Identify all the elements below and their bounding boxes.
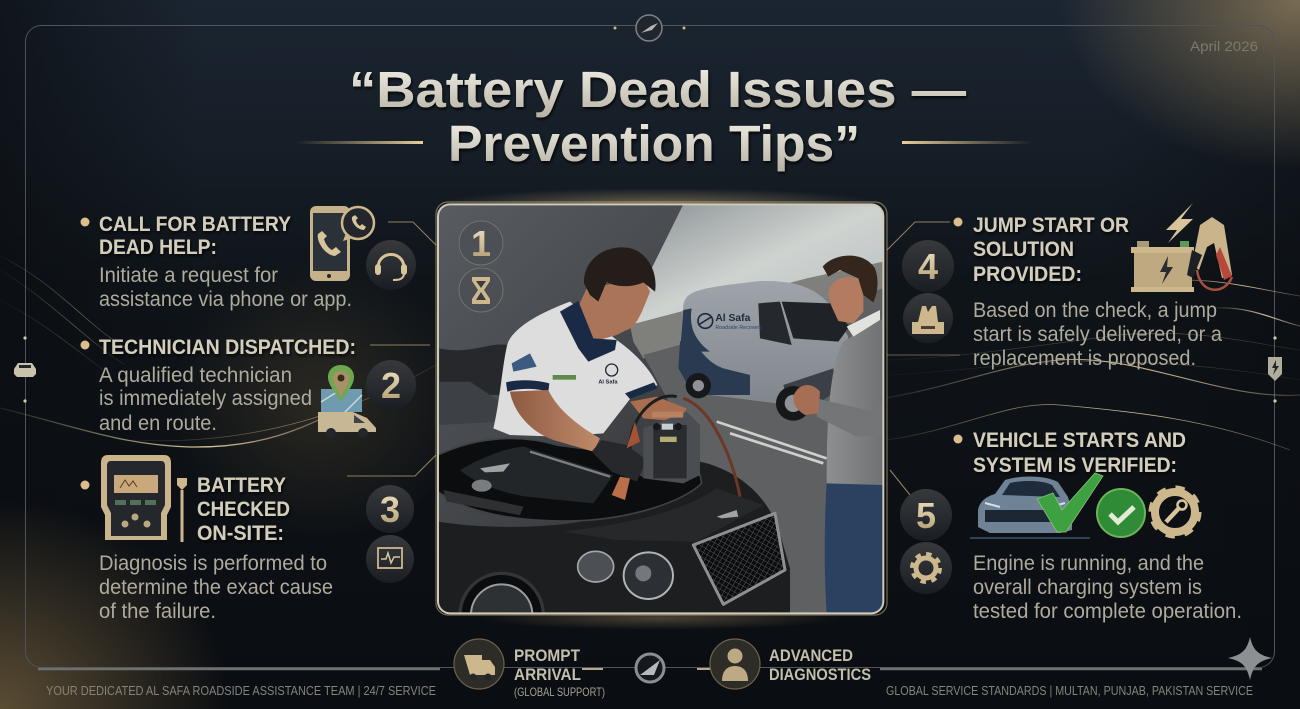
- step 3 heading: [197, 473, 290, 545]
- step 3 heading: BATTERY: [197, 473, 286, 497]
- footer: prompt arrival: [454, 639, 605, 699]
- step 4 heading: SOLUTION: [973, 237, 1074, 261]
- title accent lines: [295, 141, 1032, 144]
- step 4 description: Based on the check, a jump: [973, 299, 1217, 322]
- step 2 heading: TECHNICIAN DISPATCHED:: [99, 335, 356, 359]
- step 3 heading: CHECKED: [197, 497, 290, 521]
- icon: battery pulse badge: [366, 535, 414, 583]
- title: [349, 61, 966, 172]
- badge: step 2: [366, 360, 416, 410]
- step 4: jump start: [954, 213, 1222, 370]
- icon: worker badge: [710, 639, 760, 689]
- advanced diagnostics text: DIAGNOSTICS: [769, 665, 871, 684]
- icon: delivery truck badge: [454, 639, 504, 689]
- top logo emblem: [614, 15, 686, 41]
- step 4 description: [973, 299, 1222, 370]
- icon: gear with wrench: [1152, 488, 1198, 536]
- prompt arrival text: PROMPT: [514, 646, 581, 665]
- badge: step 1: 1: [471, 223, 491, 264]
- step 1: call for help: [80, 212, 352, 311]
- scene background: [438, 204, 883, 613]
- step 1 description: assistance via phone or app.: [99, 288, 352, 311]
- title: “Battery Dead Issues —: [349, 61, 966, 118]
- step 4 description: start is safely delivered, or a: [973, 323, 1222, 346]
- badge: step 5: [900, 489, 952, 541]
- step 5 heading: SYSTEM IS VERIFIED:: [973, 453, 1177, 477]
- icon: battery diagnostic tool: [101, 455, 187, 542]
- step 5 description: tested for complete operation.: [973, 600, 1242, 623]
- step 1 heading: DEAD HELP:: [99, 235, 217, 259]
- step 5 description: Engine is running, and the: [973, 552, 1204, 575]
- side icon: battery: [1268, 336, 1282, 403]
- badge: step 1: [459, 221, 503, 265]
- badge: step 4: [902, 240, 954, 292]
- icon: blue car: [970, 476, 1090, 538]
- step 1 description: Initiate a request for: [99, 264, 278, 287]
- step 1 description: [99, 264, 352, 311]
- icon: phone with chat bubble: [310, 206, 374, 281]
- jump starter with cables: [612, 396, 740, 500]
- step 5 description: [973, 552, 1242, 623]
- step 5 heading: VEHICLE STARTS AND: [973, 428, 1186, 452]
- step 2 description: is immediately assigned: [99, 387, 312, 410]
- badge: step 2: 2: [381, 365, 401, 406]
- car engine and bonnet: [438, 438, 790, 613]
- decorative star: [1228, 637, 1272, 680]
- step 3 description: [99, 552, 333, 623]
- step 2 description: A qualified technician: [99, 364, 292, 387]
- step 3 heading: ON-SITE:: [197, 521, 284, 545]
- step 2: technician dispatched: [80, 335, 356, 435]
- step 4 heading: JUMP START OR: [973, 213, 1129, 237]
- icon: headset badge: [366, 240, 416, 290]
- customer: [793, 256, 883, 613]
- service van: Roadside Recovery: [715, 325, 762, 331]
- side icon: car: [14, 336, 36, 403]
- step 3 description: determine the exact cause: [99, 576, 333, 599]
- advanced diagnostics text: ADVANCED: [769, 646, 853, 665]
- step 5 description: overall charging system is: [973, 576, 1202, 599]
- prompt arrival text: (GLOBAL SUPPORT): [514, 685, 605, 699]
- advanced diagnostics text: [769, 646, 871, 684]
- technician: [493, 247, 687, 482]
- step 5 heading: [973, 428, 1186, 477]
- icon: map pin with van: [318, 365, 376, 438]
- step 4 heading: PROVIDED:: [973, 262, 1082, 286]
- service van: Al Safa: [715, 313, 751, 324]
- step 5: vehicle starts: [954, 428, 1242, 623]
- icon: large green check: [1037, 473, 1103, 532]
- footer logo: [582, 654, 713, 682]
- step 4 description: replacement is proposed.: [973, 347, 1196, 370]
- icon: gear badge: [900, 542, 952, 594]
- step 2 description: [99, 364, 312, 435]
- footer: advanced diagnostics: [710, 639, 871, 689]
- footer left text: YOUR DEDICATED AL SAFA ROADSIDE ASSISTANCE TEAM | 24/7 SERVICE: [46, 683, 436, 698]
- light waves left: [0, 256, 436, 447]
- step 1 heading: [99, 212, 291, 259]
- step 3 description: Diagnosis is performed to: [99, 552, 327, 575]
- badge: step 5: 5: [916, 495, 936, 536]
- badge: step 4: 4: [918, 246, 938, 287]
- step 4 heading: [973, 213, 1129, 286]
- connector lines: [347, 222, 960, 495]
- icon: battery with clamp: [1131, 203, 1232, 292]
- technician: Al Safa: [598, 379, 618, 385]
- title: Prevention Tips”: [448, 115, 860, 172]
- prompt arrival text: [514, 646, 605, 699]
- panel: photo of technician jump-starting a car: [436, 202, 887, 657]
- icon: hourglass: [459, 268, 503, 312]
- step 1 heading: CALL FOR BATTERY: [99, 212, 291, 236]
- light waves right: [886, 280, 1300, 450]
- prompt arrival text: ARRIVAL: [514, 665, 581, 684]
- car front grille and headlights: [458, 510, 786, 612]
- badge: step 3: 3: [380, 489, 400, 530]
- badge: step 3: [366, 485, 414, 533]
- date: April 2026: [1190, 39, 1258, 54]
- service van: [678, 281, 849, 422]
- step 3 description: of the failure.: [99, 600, 216, 623]
- step 3: battery checked: [80, 473, 333, 623]
- icon: green check badge: [1097, 489, 1145, 537]
- step 2 description: and en route.: [99, 412, 217, 435]
- icon: battery tool badge: [903, 293, 953, 343]
